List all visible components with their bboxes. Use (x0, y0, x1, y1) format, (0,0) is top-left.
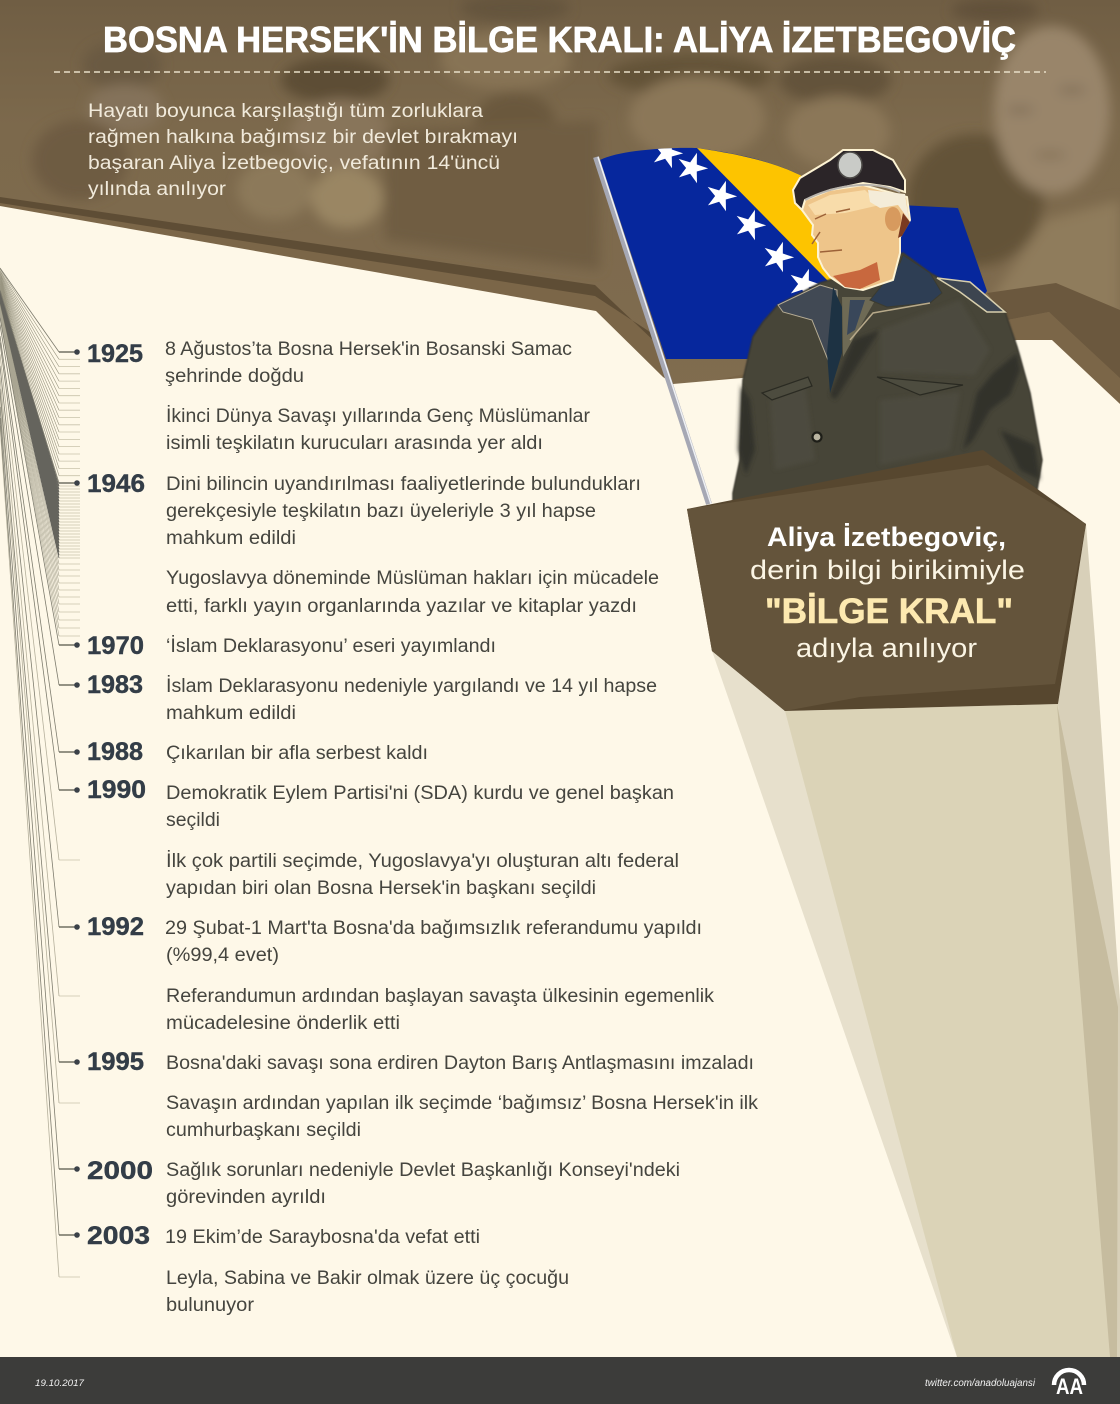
timeline event text: mücadelesine önderlik etti (166, 1013, 400, 1034)
light horizontal ticks (59, 359, 80, 1277)
timeline event text: İslam Deklarasyonu nedeniyle yargılandı ve 14 yıl hapse (166, 676, 657, 697)
hair (868, 190, 909, 220)
timeline years: 1995 (87, 1048, 144, 1076)
hatch lines (0, 269, 59, 476)
neck flush (833, 262, 880, 289)
panel: header photo of soldiers (0, 0, 1120, 420)
title divider (54, 71, 1046, 73)
panel: medium brown band (0, 199, 1120, 420)
timeline event text: gerekçesiyle teşkilatın bazı üyeleriyle 3 yıl hapse (166, 501, 596, 522)
tie and shirt (842, 297, 877, 357)
timeline years: 1925 (87, 340, 143, 368)
collar trim (850, 303, 930, 340)
face (802, 185, 910, 290)
timeline event text: Bosna'daki savaşı sona erdiren Dayton Barış Antlaşmasını imzaladı (166, 1053, 754, 1074)
beret badge (838, 152, 862, 178)
timeline fan of lines (0, 268, 80, 1277)
lower hatch lines (0, 304, 59, 636)
callout line: name: Aliya İzetbegoviç, (767, 522, 1006, 552)
intro text (88, 101, 518, 200)
intro text: yılında anılıyor (88, 179, 227, 200)
timeline event text: yapıdan biri olan Bosna Hersek'in başkanı seçildi (166, 878, 596, 899)
intro text: Hayatı boyunca karşılaştığı tüm zorluklara (88, 101, 483, 122)
timeline years: 1970 (87, 632, 144, 660)
timeline event text: görevinden ayrıldı (166, 1187, 326, 1208)
timeline event text: ‘İslam Deklarasyonu’ eseri yayımlandı (166, 636, 496, 657)
timeline event text: mahkum edildi (166, 528, 296, 549)
title: BOSNA HERSEK'İN BİLGE KRALI: ALİYA İZETBEGOVİÇ (103, 19, 1016, 60)
jacket (733, 253, 1042, 510)
timeline dots (74, 349, 80, 1238)
timeline event text: Referandumun ardından başlayan savaşta ülkesinin egemenlik (166, 986, 715, 1007)
timeline event text: Dini bilincin uyandırılması faaliyetlerinde bulundukları (166, 474, 641, 495)
icon: news agency logo: AA (1056, 1374, 1083, 1399)
timeline event text: Sağlık sorunları nedeniyle Devlet Başkanlığı Konseyi'ndeki (166, 1160, 680, 1181)
pocket flaps (762, 377, 963, 400)
forehead highlight (808, 190, 880, 215)
callout line: highlight: "BİLGE KRAL" (765, 592, 1013, 631)
footer bar (0, 1357, 1120, 1404)
timeline event text (165, 339, 759, 1316)
panel: dark strip (0, 197, 655, 342)
podium outer (687, 450, 1086, 711)
timeline event text: İlk çok partili seçimde, Yugoslavya'yı oluşturan altı federal (166, 851, 679, 872)
panel: podium shadow (712, 524, 1120, 1357)
timeline event text: Demokratik Eylem Partisi'ni (SDA) kurdu ve genel başkan (166, 783, 674, 804)
callout line: description: derin bilgi birikimiyle (750, 555, 1025, 585)
intro text: başaran Aliya İzetbegoviç, vefatının 14'üncü (88, 153, 500, 174)
timeline event text: şehrinde doğdu (165, 366, 304, 387)
timeline years: 1990 (87, 776, 146, 804)
undershirt (827, 287, 842, 393)
timeline event text: Çıkarılan bir afla serbest kaldı (166, 743, 428, 764)
timeline years (87, 340, 153, 1250)
timeline event text: 29 Şubat-1 Mart'ta Bosna'da bağımsızlık referandumu yapıldı (165, 918, 702, 939)
timeline years: 1992 (87, 913, 144, 941)
year slanted lines (0, 268, 59, 1235)
panel: right dark band (987, 283, 1120, 380)
footer date: 19.10.2017 (35, 1378, 85, 1389)
podium face (687, 465, 1086, 711)
timeline event text: 8 Ağustos’ta Bosna Hersek'in Bosanski Samac (165, 339, 572, 360)
button (812, 432, 822, 442)
timeline years: 2003 (87, 1222, 150, 1250)
jacket mid tones (770, 300, 990, 470)
timeline event text: Yugoslavya döneminde Müslüman hakları için mücadele (166, 568, 659, 589)
timeline event text: isimli teşkilatın kurucuları arasında yer aldı (166, 433, 543, 454)
shoulder strap (937, 278, 1005, 312)
timeline event text: mahkum edildi (166, 703, 296, 724)
timeline event text: Leyla, Sabina ve Bakir olmak üzere üç çocuğu (166, 1268, 569, 1289)
hair shadow behind ear (898, 213, 910, 238)
icon: Bosnian flag with pole (596, 133, 987, 504)
timeline event text: bulunuyor (166, 1295, 255, 1316)
light item lines (0, 354, 59, 1277)
jacket shadows (738, 330, 1040, 480)
left collar (778, 285, 838, 360)
timeline years: 1988 (87, 738, 143, 766)
beret (793, 150, 905, 210)
ear (885, 207, 901, 231)
timeline event text: etti, farklı yayın organlarında yazılar ve kitaplar yazdı (166, 596, 637, 617)
timeline event text: seçildi (166, 810, 220, 831)
beret band (805, 185, 900, 200)
callout line: closing: adıyla anılıyor (796, 633, 977, 663)
timeline event text: cumhurbaşkanı seçildi (166, 1120, 361, 1141)
dense wedge lines (0, 290, 59, 558)
timeline years: 2000 (87, 1157, 153, 1185)
podium callout (687, 450, 1086, 711)
timeline event text: (%99,4 evet) (166, 945, 279, 966)
brows and eyes (812, 209, 850, 252)
tie detail (847, 300, 865, 335)
right collar (870, 255, 942, 307)
timeline event text: Savaşın ardından yapılan ilk seçimde ‘bağımsız’ Bosna Hersek'in ilk (166, 1093, 759, 1114)
timeline years: 1946 (87, 470, 145, 498)
footer social handle: twitter.com/anadoluajansi (925, 1378, 1036, 1389)
portrait: Aliya Izetbegović (733, 150, 1042, 510)
timeline event text: İkinci Dünya Savaşı yıllarında Genç Müslümanlar (166, 406, 591, 427)
timeline years: 1983 (87, 671, 143, 699)
intro text: rağmen halkına bağımsız bir devlet bırakmayı (88, 127, 518, 148)
timeline event text: 19 Ekim’de Saraybosna'da vefat etti (165, 1227, 480, 1248)
timeline year connectors (59, 352, 78, 1235)
